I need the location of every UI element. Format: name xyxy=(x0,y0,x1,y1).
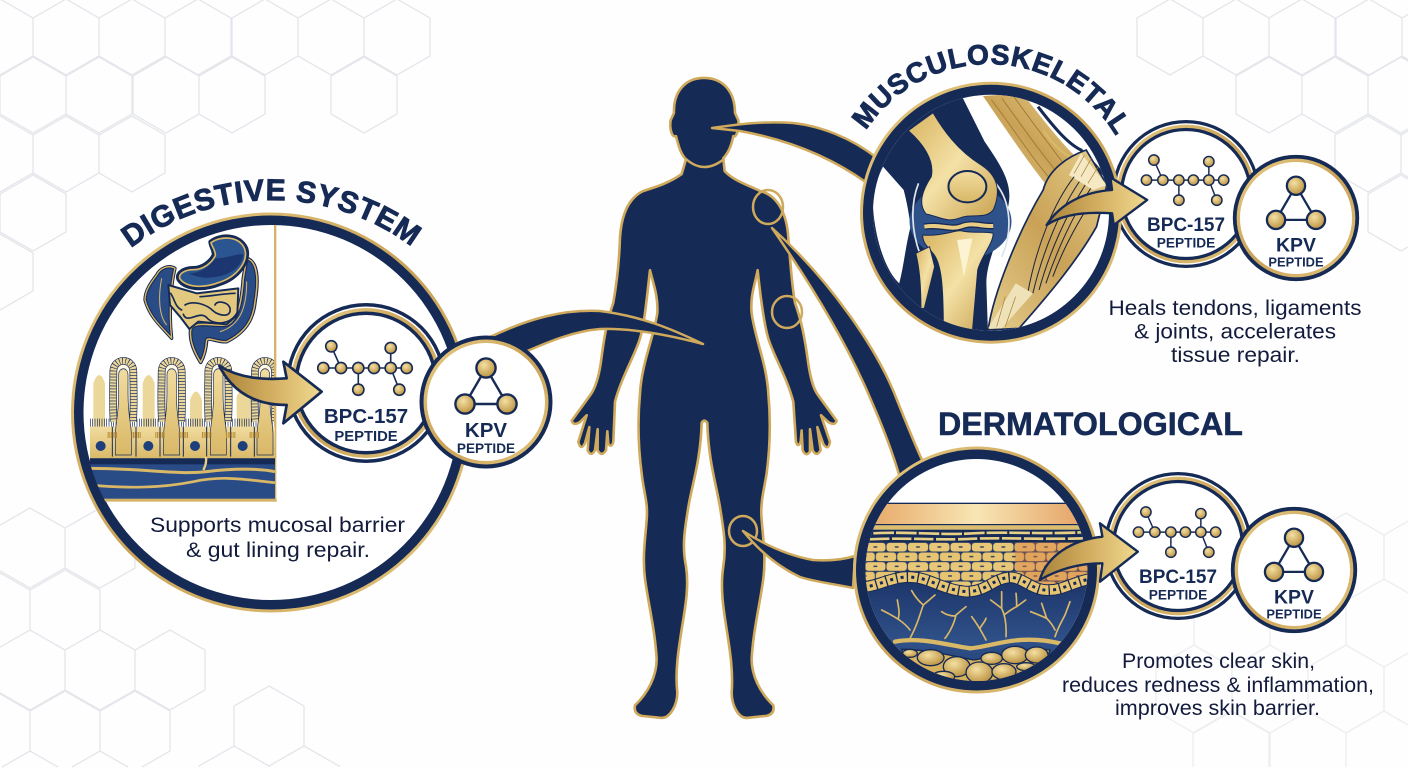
BPC-157 circle xyxy=(286,303,446,463)
panel: dermatological xyxy=(853,406,1374,720)
skin main circle xyxy=(853,446,1100,694)
heading: musculoskeletal: MUSCULOSKELETAL xyxy=(850,44,1126,136)
KPV circle: PEPTIDE xyxy=(1266,606,1322,621)
panel: musculoskeletal xyxy=(850,44,1362,367)
KPV circle: PEPTIDE xyxy=(1268,254,1324,269)
dermatological description: improves skin barrier. xyxy=(1115,697,1320,720)
upper muscle xyxy=(983,95,1074,183)
KPV circle: KPV xyxy=(1276,234,1316,256)
BPC-157 circle: PEPTIDE xyxy=(1157,236,1215,251)
KPV circle xyxy=(1231,507,1357,633)
arrow: abdomen to digestive xyxy=(490,311,703,352)
musculoskeletal description: tissue repair. xyxy=(1171,344,1300,367)
arrow: head to musculoskeletal xyxy=(712,122,877,183)
musculoskeletal description: Heals tendons, ligaments xyxy=(1108,297,1362,320)
BPC-157 circle: BPC-157 xyxy=(324,405,408,428)
KPV circle: KPV xyxy=(465,419,507,442)
knee and muscle illustration xyxy=(873,95,1106,331)
meniscus xyxy=(924,224,993,228)
dermatological description: Promotes clear skin, xyxy=(1122,650,1315,673)
intestinal illustration xyxy=(90,225,277,502)
KPV circle: PEPTIDE xyxy=(457,441,515,456)
BPC-157 circle: BPC-157 xyxy=(1147,215,1225,236)
digestive main circle xyxy=(71,212,471,612)
skin layers illustration xyxy=(866,502,1088,681)
KPV circle xyxy=(420,336,552,468)
knee main circle xyxy=(860,82,1122,344)
BPC-157 circle: PEPTIDE xyxy=(334,429,398,445)
tibia xyxy=(923,231,993,330)
panel: digestive system xyxy=(71,178,552,612)
digestive description: & gut lining repair. xyxy=(186,539,370,562)
gold arrow into BPC-157 xyxy=(1047,177,1147,225)
dermatological description: reduces redness & inflammation, xyxy=(1062,674,1374,697)
BPC-157 circle: PEPTIDE xyxy=(1149,588,1207,603)
BPC-157 circle: BPC-157 xyxy=(1139,567,1217,588)
KPV circle: KPV xyxy=(1274,586,1314,608)
heading: dermatological: DERMATOLOGICAL xyxy=(938,406,1243,442)
musculoskeletal description: & joints, accelerates xyxy=(1134,320,1336,344)
arrow: knee to dermatological xyxy=(743,531,855,588)
fat cells xyxy=(900,648,1051,681)
heading: digestive system: DIGESTIVE SYSTEM xyxy=(120,178,422,248)
human body silhouette xyxy=(572,78,837,718)
femur xyxy=(908,113,997,220)
KPV circle xyxy=(1233,155,1359,281)
patella xyxy=(948,171,986,202)
fibula xyxy=(916,247,935,308)
arrow: shoulder to dermatological xyxy=(772,228,923,478)
gold arrow into BPC-157 xyxy=(219,362,322,423)
capillary branches xyxy=(882,591,1070,640)
BPC-157 circle xyxy=(1112,120,1260,268)
gold arrow into BPC-157 xyxy=(1040,523,1138,582)
BPC-157 circle xyxy=(1104,472,1252,620)
digestive description: Supports mucosal barrier xyxy=(150,514,405,537)
